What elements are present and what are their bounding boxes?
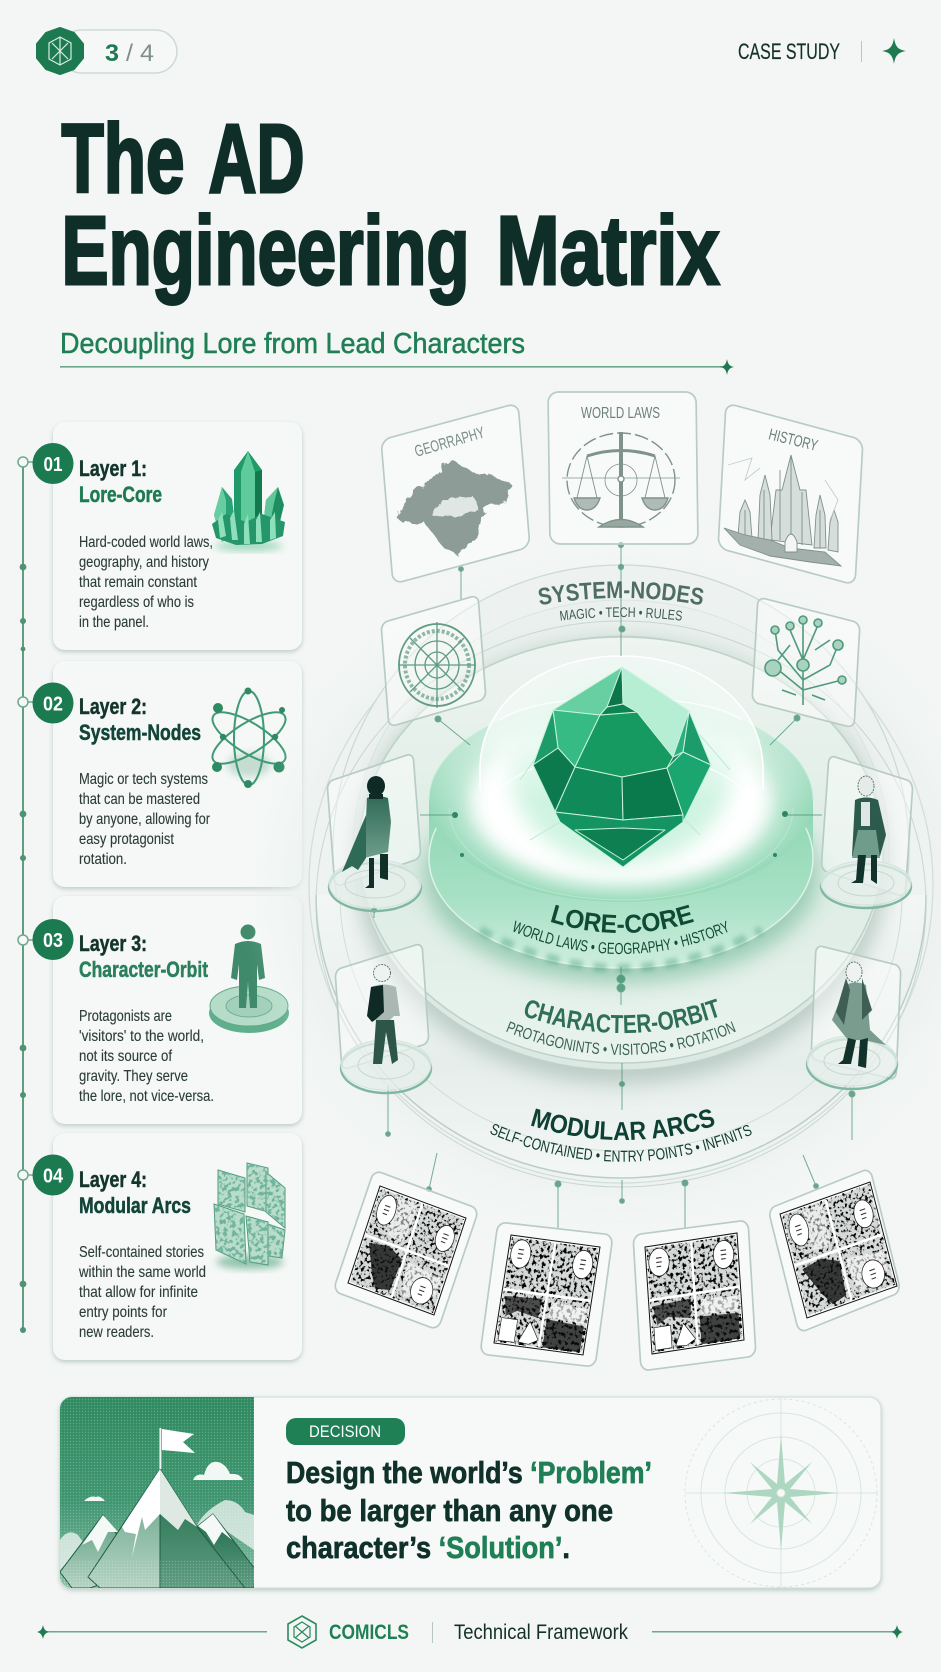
description layer 2: easy protagonist (79, 831, 174, 848)
label: character-orbit (506, 998, 736, 1056)
description layer 4 (78, 1244, 206, 1341)
footer right rule (652, 1625, 903, 1639)
icon: figure on disc (209, 924, 289, 1033)
description layer 1: that remain constant (79, 574, 197, 591)
badge 03 (32, 919, 74, 960)
label: lore-core: WORLD LAWS • GEOGRAPHY • HISTORY (514, 920, 728, 954)
label geography: GEORRAPHY (413, 425, 487, 461)
label: system-nodes (538, 581, 704, 621)
description layer 2 (79, 771, 211, 868)
manga tile 1 (333, 1170, 479, 1330)
glass dome (473, 656, 769, 884)
heading layer 2: System-Nodes (79, 720, 201, 745)
central layered diagram (258, 542, 934, 1228)
icon: castle sketch (724, 455, 841, 566)
label: lore-core (514, 904, 728, 954)
manga tile 3 (633, 1220, 756, 1371)
badge 01: 01 (44, 454, 62, 476)
heading layer 1 (79, 456, 162, 507)
description layer 4: Self-contained stories (79, 1244, 204, 1261)
heading layer 4: Modular Arcs (79, 1193, 191, 1218)
panel: history (718, 403, 863, 585)
decision statement: Design the world’s ‘Problem’ (286, 1455, 652, 1490)
figure panel: upper right (821, 755, 913, 908)
heading layer 3 (79, 931, 209, 982)
description layer 2: Magic or tech systems (79, 771, 208, 788)
tag label: CASE STUDY (738, 39, 840, 64)
pedestal (329, 860, 421, 911)
description layer 4: that allow for infinite (79, 1284, 198, 1301)
icon: sparkle star (882, 38, 906, 64)
footer (37, 1616, 903, 1648)
badge 04 (32, 1154, 74, 1196)
pedestal (821, 861, 911, 908)
label: character-orbit: CHARACTER-ORBIT (524, 998, 718, 1034)
title (62, 104, 720, 305)
footer caption: Technical Framework (454, 1621, 628, 1644)
figure panel: lower left (335, 943, 431, 1093)
manga tile 4 (768, 1168, 901, 1333)
panel: layer 1 card (32, 422, 302, 650)
panel: decision banner (60, 1397, 881, 1588)
panel: layer 4 card (32, 1133, 302, 1360)
page number: 3 / 4 (105, 40, 154, 67)
ring: character-orbit level (359, 637, 883, 1070)
description layer 4: within the same world (78, 1264, 206, 1281)
decision statement: to be larger than any one (286, 1493, 613, 1528)
label: lore-core: LORE-CORE (550, 904, 694, 933)
description layer 4: entry points for (79, 1304, 168, 1321)
decision statement: character’s ‘Solution’. (286, 1530, 570, 1565)
panel: world laws (548, 392, 698, 544)
heading layer 3: Layer 3: (79, 931, 147, 956)
description layer 2: that can be mastered (79, 791, 200, 808)
description layer 3 (79, 1008, 214, 1105)
description layer 3: 'visitors' to the world, (79, 1028, 204, 1045)
character silhouette (832, 962, 886, 1068)
description layer 3: the lore, not vice-versa. (79, 1088, 214, 1105)
description layer 1: Hard-coded world laws, (79, 534, 213, 551)
core disc (429, 656, 813, 968)
title: Engineering (62, 196, 470, 305)
figure panel: upper left (327, 753, 421, 911)
heading layer 4: Layer 4: (79, 1167, 147, 1192)
ring: modular arcs level (316, 621, 926, 1187)
description layer 2: by anyone, allowing for (79, 811, 211, 828)
compass watermark (685, 1398, 877, 1587)
surface nodes (452, 811, 788, 857)
flag (159, 1428, 161, 1469)
decision statement (286, 1455, 652, 1565)
panel: geography (381, 403, 530, 584)
character silhouette (367, 964, 400, 1064)
label: system-nodes: MAGIC • TECH • RULES (560, 607, 682, 621)
description layer 3: gravity. They serve (79, 1068, 188, 1085)
description layer 3: Protagonists are (79, 1008, 172, 1025)
pedestal (341, 1040, 431, 1093)
pedestal (807, 1036, 897, 1089)
label: modular arcs: MODULAR ARCS (531, 1108, 714, 1140)
description layer 3: not its source of (79, 1048, 172, 1065)
icon: balance scale (562, 432, 680, 527)
icon: crystal cluster (212, 451, 285, 551)
badge 02: 02 (43, 694, 63, 716)
footer logo (288, 1616, 316, 1648)
tag divider (861, 41, 862, 62)
subtitle rule with star (60, 359, 734, 375)
panel: layer 3 card (32, 896, 302, 1124)
panel: circuit tree (752, 597, 860, 728)
decision pill: DECISION (309, 1422, 381, 1441)
outer glass ring (281, 580, 941, 1200)
figure panel: lower right (807, 945, 901, 1089)
description layer 4: new readers. (79, 1324, 154, 1341)
badge 04: 04 (43, 1166, 64, 1188)
description layer 1: in the panel. (79, 614, 149, 631)
panel: magic circle (381, 595, 486, 727)
heading layer 4 (79, 1167, 191, 1218)
heading layer 2 (79, 694, 201, 745)
description layer 1 (79, 534, 213, 631)
label world laws: WORLD LAWS (581, 405, 660, 422)
icon: island map (396, 460, 512, 555)
panel: layer 2 card (32, 661, 302, 887)
icon: magic circle (398, 622, 476, 708)
description layer 1: geography, and history (79, 554, 209, 571)
decision pill (286, 1418, 405, 1445)
title: The (62, 104, 184, 213)
title: Matrix (496, 196, 720, 305)
timeline (18, 457, 34, 1333)
footer left rule (37, 1625, 267, 1639)
description layer 2: rotation. (79, 851, 127, 868)
heading layer 1: Layer 1: (79, 456, 147, 481)
description layer 1: regardless of who is (79, 594, 194, 611)
heading layer 2: Layer 2: (79, 694, 147, 719)
icon: circuit tree (765, 616, 846, 705)
ring: system-nodes band (333, 565, 909, 1135)
header: case study tag (738, 38, 906, 64)
label: system-nodes: SYSTEM-NODES (538, 581, 704, 605)
label history: HISTORY (767, 426, 820, 455)
badge 02 (32, 682, 74, 724)
subtitle: Decoupling Lore from Lead Characters (60, 328, 525, 360)
illustration: summit with flag (60, 1397, 255, 1588)
heading layer 3: Character-Orbit (79, 957, 209, 982)
connector lines and nodes (372, 542, 855, 1228)
emerald gem (533, 667, 711, 867)
icon: stacked comic pages (214, 1163, 285, 1269)
label: modular arcs: SELF-CONTAINED • ENTRY POINTS • INFINITS (490, 1124, 752, 1162)
header: progress pill (37, 28, 177, 74)
title: AD (208, 104, 304, 213)
clouds (60, 1462, 254, 1570)
character silhouette (851, 776, 886, 884)
badge 01 (32, 443, 74, 484)
label: character-orbit: PROTAGONINTS • VISITORS • ROTATION (506, 1021, 736, 1056)
pill outline (60, 30, 177, 73)
manga tile 2 (480, 1222, 613, 1367)
icon: logo badge (37, 28, 83, 74)
footer divider (432, 1622, 433, 1643)
icon: atom (205, 688, 293, 788)
footer brand: COMICLS (329, 1621, 409, 1644)
character silhouette (342, 776, 391, 888)
label: modular arcs (490, 1108, 752, 1162)
snow caps (122, 1469, 160, 1557)
badge 03: 03 (43, 930, 63, 952)
heading layer 1: Lore-Core (79, 482, 162, 507)
mountains (60, 1514, 116, 1588)
